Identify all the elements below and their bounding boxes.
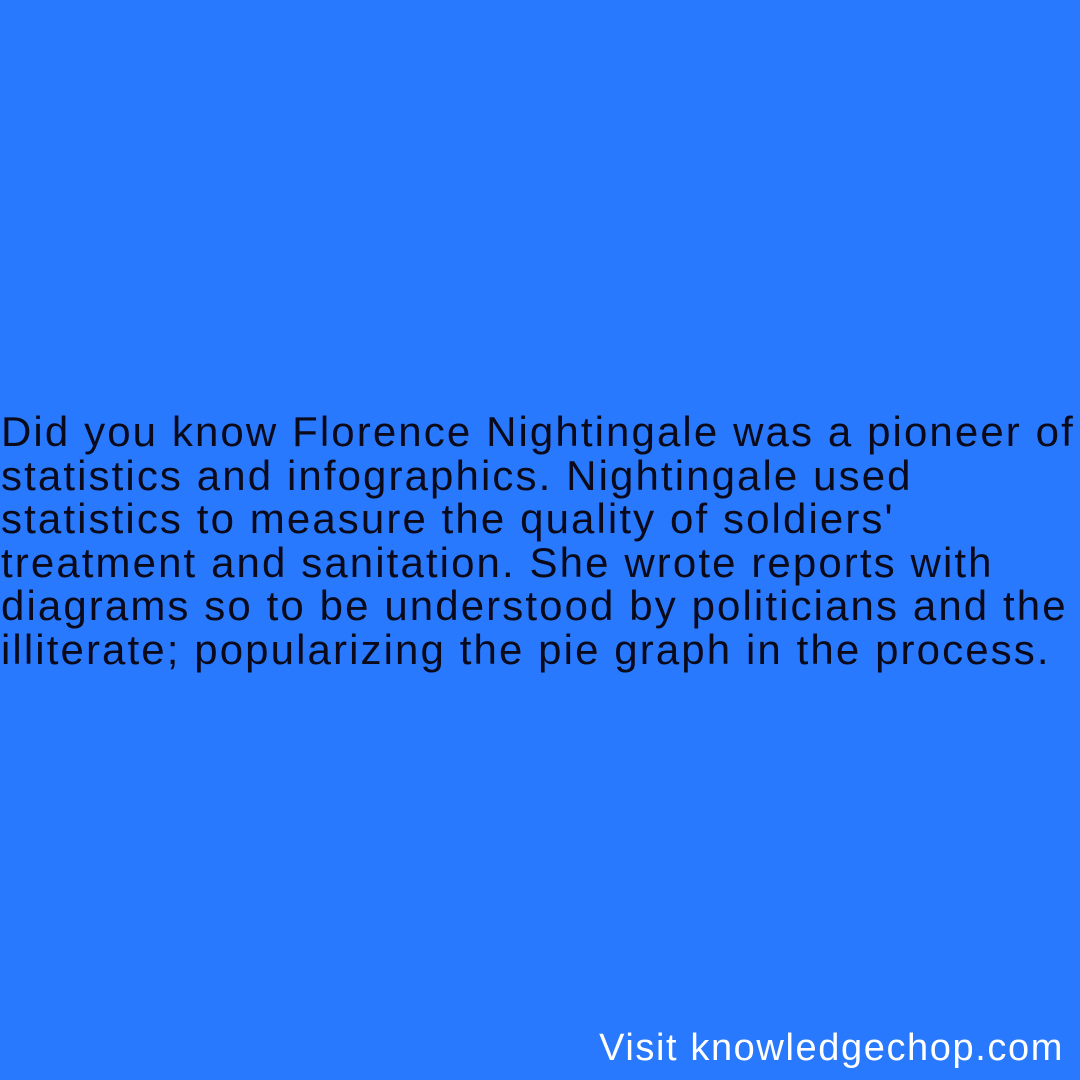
main text block: statistics and infographics. Nightingale used <box>1 452 913 499</box>
footer link text: Visit knowledgechop.com <box>599 1027 1064 1069</box>
main text block: statistics to measure the quality of soldiers' <box>1 495 895 542</box>
main text block <box>1 408 1075 673</box>
main text block: illiterate; popularizing the pie graph in the process. <box>1 626 1051 673</box>
main text block: diagrams so to be understood by politicians and the <box>1 582 1068 629</box>
main text block: Did you know Florence Nightingale was a pioneer of <box>1 408 1075 455</box>
main text block: treatment and sanitation. She wrote reports with <box>1 539 994 586</box>
